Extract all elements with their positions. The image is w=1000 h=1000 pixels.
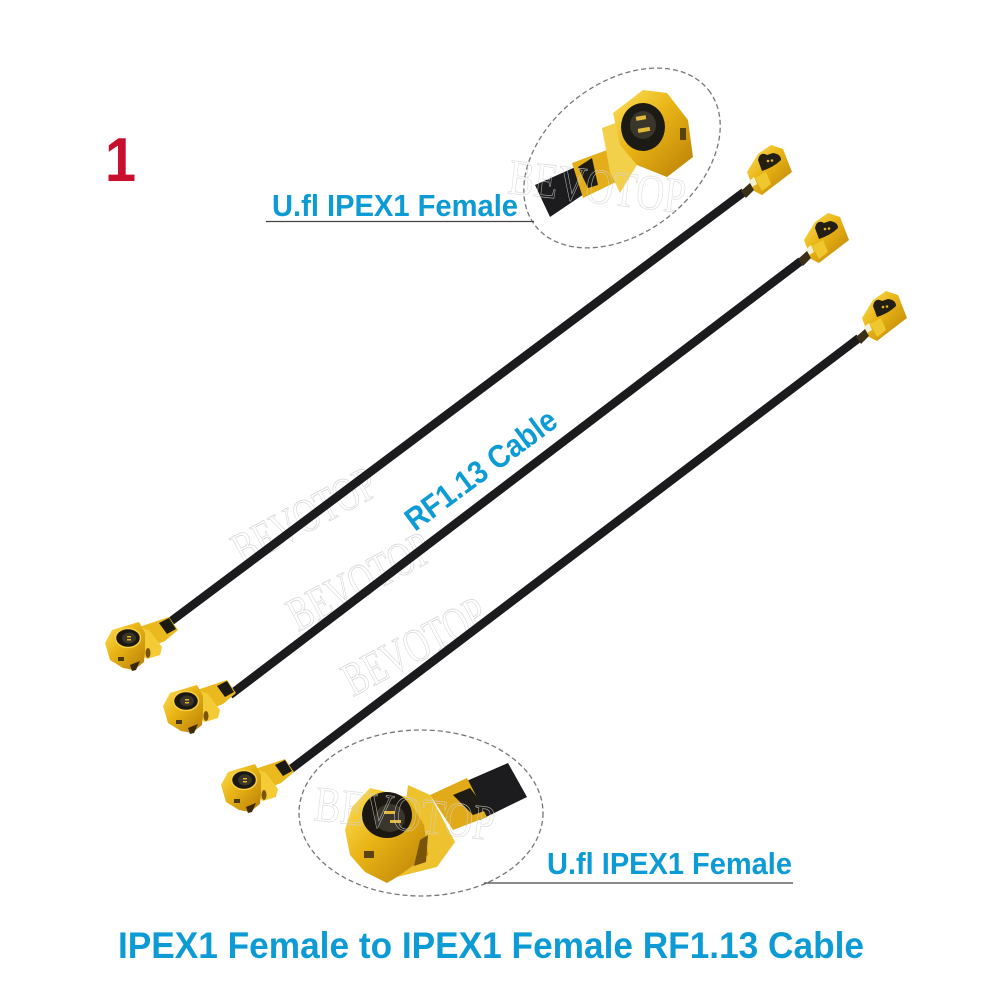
dashed ellipse top (489, 31, 755, 285)
callout: top connector (489, 31, 755, 285)
watermarks: BEVOTOP (333, 587, 496, 707)
cables (170, 192, 859, 772)
watermarks: BEVOTOP (223, 457, 386, 577)
connectors: upper row (741, 145, 907, 344)
label: bottom U.fl IPEX1 Female: U.fl IPEX1 Female (547, 846, 792, 881)
label: RF1.13 Cable: RF1.13 Cable (398, 402, 564, 538)
connectors: lower row (105, 617, 294, 813)
gold plug bottom (430, 778, 487, 830)
watermark top: BEVOTOP (506, 148, 689, 224)
watermarks: BEVOTOP (278, 522, 441, 642)
label: top U.fl IPEX1 Female: U.fl IPEX1 Female (272, 188, 518, 223)
callout: bottom connector (299, 730, 543, 896)
title: IPEX1 Female to IPEX1 Female RF1.13 Cable (118, 925, 864, 966)
number 1: 1 (105, 126, 136, 195)
cable stub top (535, 165, 590, 217)
watermark bottom: BEVOTOP (312, 775, 498, 851)
dashed ellipse bottom (299, 730, 543, 896)
watermarks (223, 457, 496, 707)
cable stub bottom (462, 763, 527, 820)
gold plug top (572, 150, 620, 198)
